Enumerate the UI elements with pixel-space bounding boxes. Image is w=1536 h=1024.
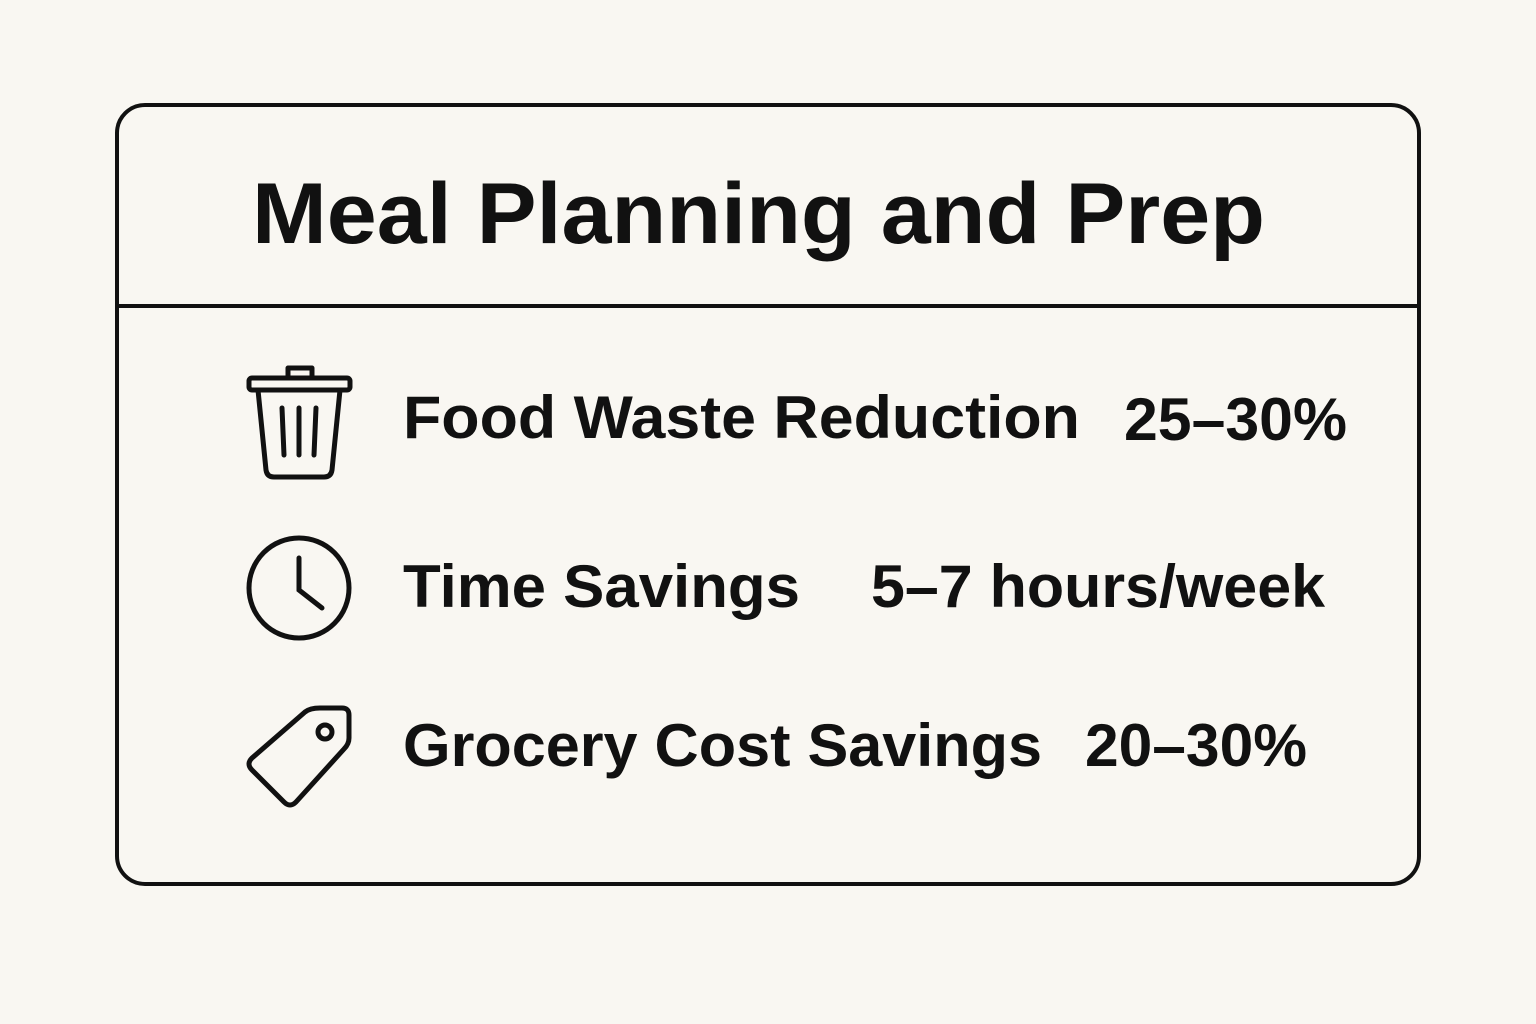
value: 20-30%: 20–30%	[1085, 712, 1307, 779]
panel: card	[117, 105, 1419, 884]
icon: price tag	[249, 708, 349, 805]
text: grocery cost savings: Grocery Cost Savings	[403, 712, 1042, 779]
text: time savings: Time Savings	[403, 553, 800, 620]
title: Meal Planning and Prep	[252, 166, 1265, 262]
value: 25-30%: 25–30%	[1124, 386, 1347, 453]
value: hours/week: 5–7 hours/week	[871, 553, 1326, 620]
icon: clock	[249, 538, 349, 638]
icon: trash can	[249, 368, 350, 477]
text: food waste reduction: Food Waste Reduction	[403, 384, 1080, 451]
